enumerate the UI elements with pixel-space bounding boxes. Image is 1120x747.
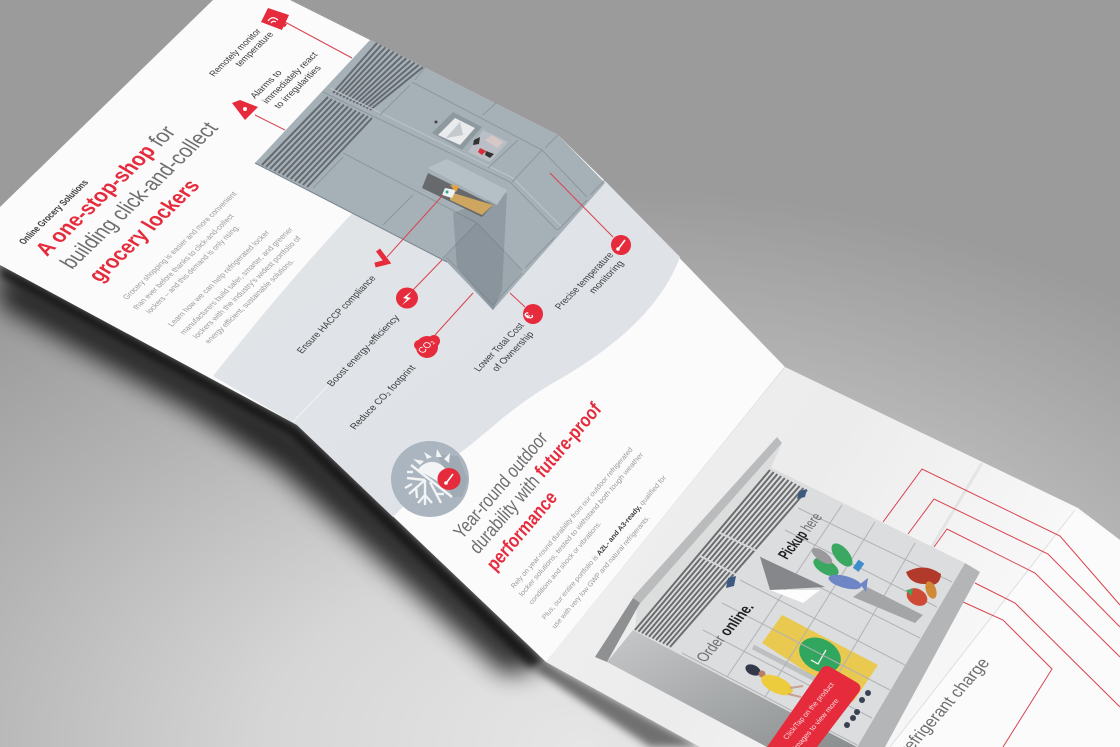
icon: thermometer (611, 235, 631, 255)
status indicators (726, 489, 807, 588)
label: alarms: Alarms to (248, 68, 284, 100)
vent stripes (635, 470, 807, 647)
label: ensure HACCP compliance: Ensure HACCP compliance (295, 274, 379, 356)
callout text: Click/Tap on the product (781, 680, 837, 741)
body copy: durability: Rely on year-round durability from our outdoor refrigerated (510, 446, 635, 590)
label: precise temperature monitoring: monitoring (587, 259, 627, 296)
icon: alarm triangle (232, 100, 258, 120)
vent: lower (262, 97, 372, 187)
locker door seams (255, 67, 605, 305)
grocery items (809, 540, 941, 623)
touch screen (432, 112, 482, 150)
shadow column (453, 193, 507, 310)
label: boost energy-efficiency: Boost energy-efficiency (325, 313, 403, 389)
body copy: Learn how we can help refrigerated locker (166, 229, 272, 328)
heading: building click-and-collect (54, 118, 223, 273)
callout lines (255, 22, 613, 335)
locker grid lines (682, 505, 952, 745)
sun half (413, 449, 450, 486)
body copy: Grocery shopping is easier and more convenient (121, 190, 240, 301)
diagram: red contour lines (883, 469, 1120, 747)
label: lower total cost of ownership: of Ownership (490, 330, 537, 374)
group: page 1 intro text (17, 118, 304, 345)
heading: grocery lockers (82, 175, 205, 286)
icon: outdoor durability snowflake and sun (391, 441, 469, 517)
icon: wifi alert (261, 8, 289, 30)
body copy: durability: use with very low GWP and natural refrigerants. (551, 515, 651, 630)
body copy: durability: locker solutions, tested to withstand both tough weather (518, 451, 646, 598)
illustration: pickup locker wall (595, 437, 980, 747)
label: alarms: to irregularities (272, 63, 324, 110)
label: alarms: immediately react (260, 50, 320, 105)
icon: CO2 cloud (414, 335, 440, 358)
illustration: grocery locker top view (255, 40, 605, 310)
body copy: durability (510, 446, 669, 630)
label: reduce CO2 footprint: Reduce CO₂ footprint (348, 363, 419, 432)
heading: year-round outdoor durability: Year-round outdoor (450, 428, 552, 543)
body copy: lockers with the industry's widest portfolio of (191, 234, 304, 340)
awning (633, 437, 782, 607)
text: order online: Order online. (693, 600, 758, 665)
body copy: durability: Plus, our entire portfolio is A2L- and A3-ready, qualified for (541, 474, 669, 621)
heading: A one-stop-shop for (29, 121, 181, 260)
icon: euro (522, 304, 543, 324)
callout: red click tap button (767, 666, 860, 747)
icon: energy bolt (396, 288, 418, 308)
label: precise temperature monitoring: Precise temperature (553, 251, 617, 312)
body copy: manufacturers build safer, smarter, and greener (178, 226, 296, 336)
heading: year-round outdoor durability: performance (483, 487, 562, 575)
panel: grey wave background (213, 182, 680, 517)
icon: CO2 cloud: CO₂ (416, 337, 438, 356)
icon: euro: € (522, 310, 537, 322)
eyebrow label: Online Grocery Solutions (17, 178, 92, 247)
heading: year-round outdoor durability: durability with future-proof (466, 398, 606, 558)
text: pickup here: Pickup here (775, 511, 827, 562)
vent: upper (333, 43, 423, 110)
snowflake half (405, 465, 452, 505)
body copy (121, 190, 304, 345)
label: remotely monitor temperature: Remotely monitor (207, 27, 263, 78)
open door (760, 557, 825, 603)
icon: check mark (375, 250, 387, 265)
panel: brochure cover page (0, 0, 785, 662)
label: remotely monitor temperature: temperature (233, 30, 276, 68)
body copy: than ever before thanks to click-and-collect (131, 212, 237, 311)
open compartment with groceries (422, 159, 507, 217)
body copy: lockers – and this demand is only rising. (144, 224, 242, 315)
body copy: durability: conditions and shock or vibrations. (528, 520, 603, 606)
yellow order screen (762, 615, 878, 702)
woman figure (744, 662, 803, 699)
body copy: energy efficient, sustainable solutions. (203, 258, 296, 345)
panel: third brochure page (546, 367, 1120, 747)
label: lower total cost of ownership: Lower Total Cost (472, 321, 527, 374)
keypad panel (468, 130, 508, 162)
label: alarms (248, 50, 324, 110)
green check badge (793, 631, 847, 679)
small figures (844, 690, 871, 728)
